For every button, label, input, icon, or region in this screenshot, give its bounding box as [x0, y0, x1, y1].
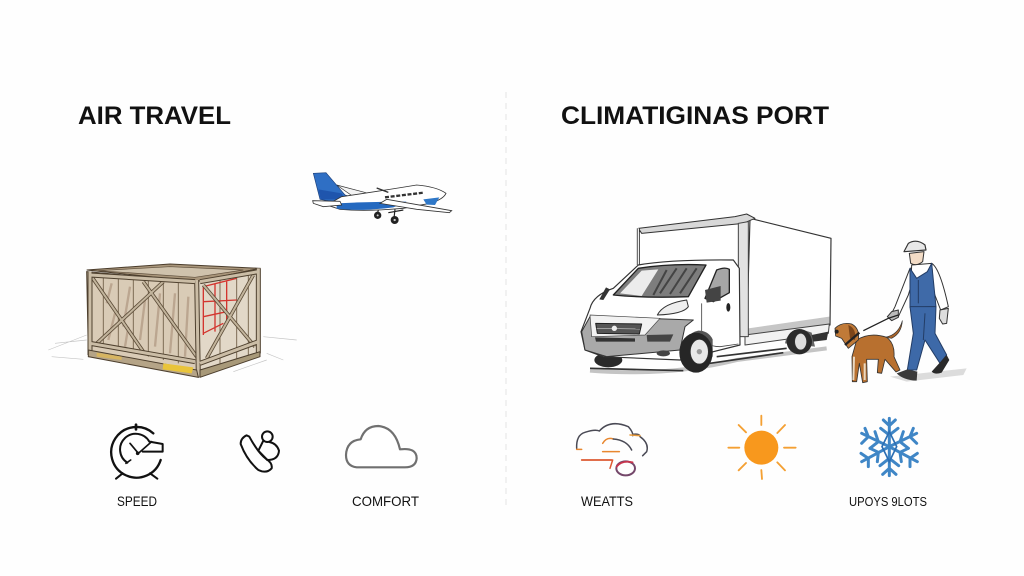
icon: sun — [728, 416, 796, 479]
label: speed: SPEED — [117, 494, 157, 509]
illustration: delivery van — [581, 214, 831, 373]
label: upoys slots: UPOYS 9LOTS — [849, 494, 927, 509]
icon: speed gauge — [111, 425, 163, 479]
icon: snowflake — [861, 418, 917, 476]
illustration: wooden crate — [48, 264, 297, 377]
icon: cloud — [346, 426, 417, 467]
van rear wheel — [785, 329, 815, 354]
illustration: person in overalls walking — [887, 241, 967, 382]
icon: weather cloud — [577, 424, 647, 475]
van front wheel — [679, 331, 713, 373]
label: comfort: COMFORT — [352, 493, 419, 509]
illustration: dog on leash — [835, 315, 902, 383]
heading: climate transport: CLIMATIGINAS PORT — [561, 102, 829, 130]
heading: air travel: AIR TRAVEL — [78, 102, 231, 130]
icon: seat comfort — [241, 431, 279, 472]
van left front wheel — [594, 353, 622, 367]
illustration: airplane — [313, 173, 452, 224]
panel: climate transport — [561, 102, 967, 509]
label: weather: WEATTS — [581, 494, 633, 509]
panel: air travel — [48, 102, 452, 509]
